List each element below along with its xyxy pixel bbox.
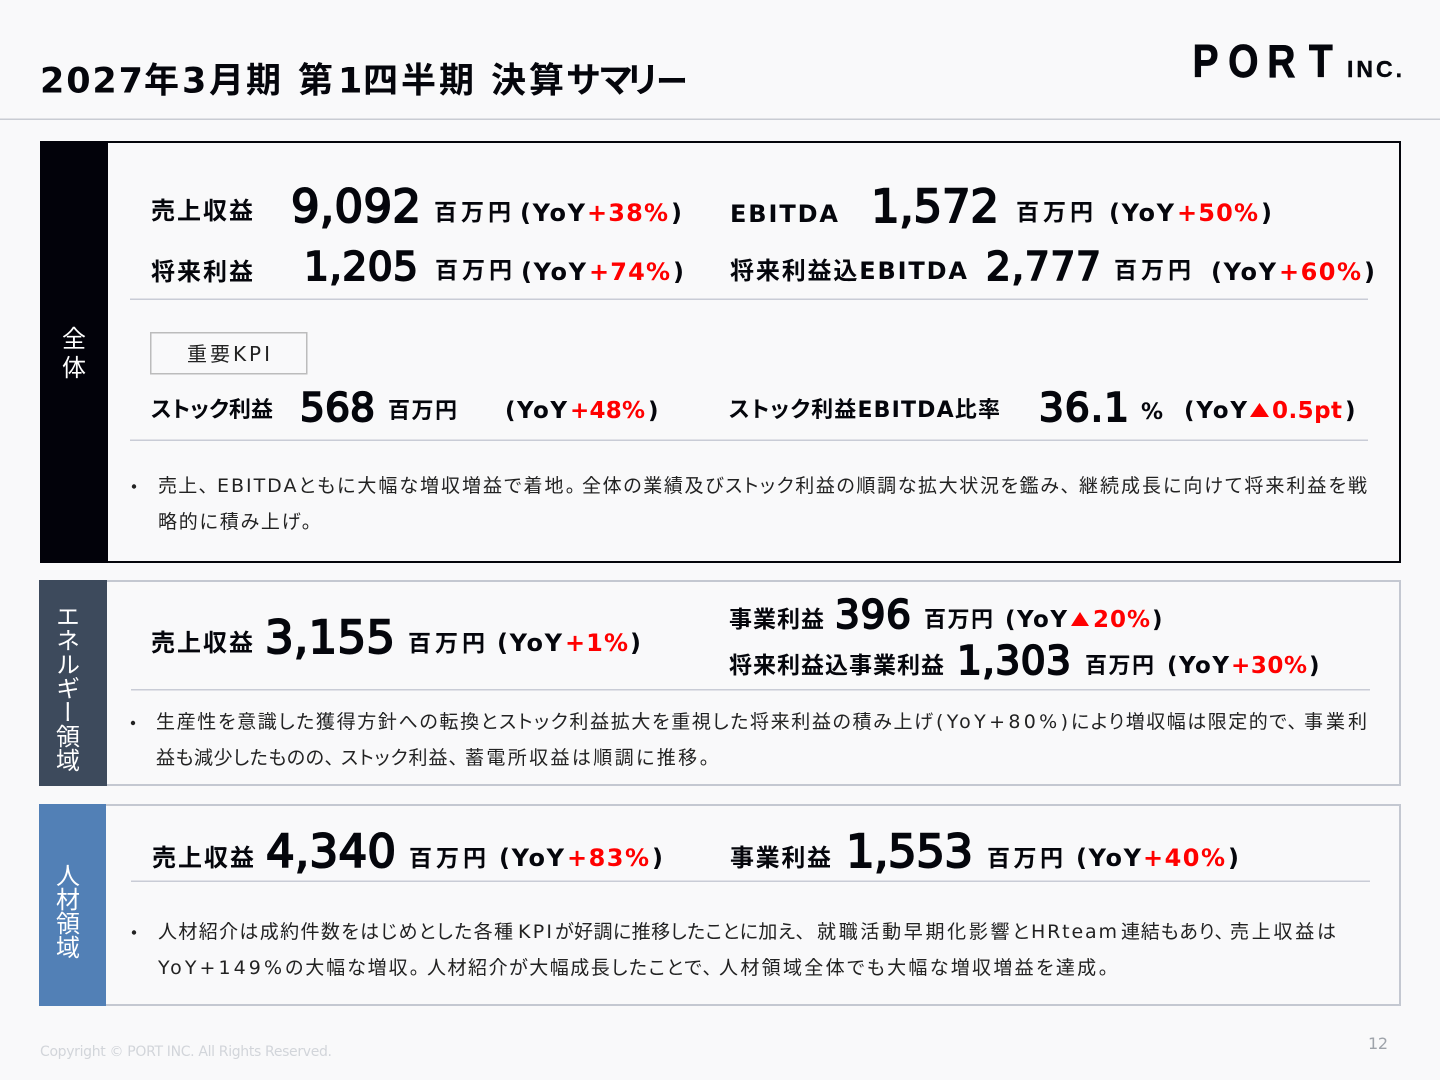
text block: HR commentary [132,921,1336,979]
metric: 将来利益込EBITDA [730,245,1375,290]
metric: ストック利益EBITDA比率: % [1141,400,1163,425]
text block: HR commentary: 売上収益は [1230,921,1336,943]
metric: ストック利益: +48% [570,398,645,424]
title: 決 [491,52,526,104]
text block: energy commentary: 益も減少したものの、 [156,747,334,769]
sidebar label: 全体: 体 [62,348,86,383]
metric: EBITDA: 1,572 [871,180,999,233]
sidebar label: 人材領域: 人材領域 [50,863,86,959]
logo: PORT INC. [1192,36,1402,88]
badge: 重要KPI [151,333,307,374]
metric: 売上収益: (YoY [520,199,586,227]
metric: ストック利益: ) [648,398,659,424]
metric: ストック利益 [151,386,659,431]
text block: overall commentary: EBITDAともに大幅な増収増益で着地。 [217,475,575,497]
title: 半 [401,52,436,104]
text block: overall commentary: 全体の業績及びストック利益の順調な拡大状況を鑑み、 [582,475,1070,497]
panel: 人材領域 (human resources) [39,804,1400,1006]
title: リ [625,52,660,104]
sidebar label: 人材領域 [39,804,106,1006]
metric: 売上収益: 9,092 [291,180,421,233]
metric: 売上収益: 百万円 [409,839,486,873]
metric: 売上収益: ) [630,629,641,657]
metric: 将来利益: +74% [589,258,670,286]
metric: EBITDA: EBITDA [730,200,838,228]
metric: 事業利益: 事業利益 [729,600,824,634]
metric: 売上収益 [151,611,641,664]
title: 1 [338,62,362,102]
sidebar label: 全体: 全 [62,319,86,354]
icon: red triangle [1071,612,1089,626]
metric: ストック利益EBITDA比率: (YoY [1184,398,1247,424]
metric: 将来利益込EBITDA: +60% [1279,258,1361,286]
text block: HR commentary: が好調に推移したことに加え、 [555,921,805,943]
metric: EBITDA: ) [1261,199,1272,227]
metric: 将来利益: ) [673,258,684,286]
metric: 将来利益: 1,205 [304,245,418,290]
panel: エネルギー領域 (energy) [39,580,1400,786]
metric: 将来利益込EBITDA: 2,777 [986,245,1101,290]
metric: ストック利益EBITDA比率: ストック利益EBITDA比率 [729,398,1000,423]
text block: energy commentary: (YoY+80%) [936,711,1068,733]
logo: PORT INC.: PORT [1192,36,1333,88]
metric: 事業利益: (YoY [1076,844,1142,872]
metric: 売上収益: +83% [567,844,649,872]
title: 四 [363,52,398,104]
text block: energy commentary: により増収幅は限定的で、 [1071,711,1297,733]
metric: 将来利益: 将来利益 [151,252,253,287]
text block: HR commentary: 人材紹介は成約件数をはじめとした各種 [158,921,513,943]
metric: EBITDA: 百万円 [1016,193,1093,227]
metric: 事業利益: 事業利益 [730,838,831,873]
text block: energy commentary: 事業利 [1304,711,1367,733]
text block: overall commentary: 略的に積み上げ。 [158,511,311,533]
title: 期 [246,52,281,104]
logo: PORT INC.: INC. [1347,56,1402,82]
icon: red triangle [1250,403,1269,417]
title: ー [656,56,688,102]
text block: HR commentary: KPI [518,921,552,943]
metric: 事業利益: (YoY [1005,607,1067,633]
text block: overall commentary [132,475,1367,533]
metric: EBITDA: +50% [1177,199,1258,227]
metric: 売上収益: ) [652,844,663,872]
sidebar label: エネルギー領域 [39,580,107,786]
text block: HR commentary: HRteam [1031,921,1117,943]
title: 年 [144,52,179,104]
metric: 売上収益: 売上収益 [151,623,253,658]
metric: 将来利益込事業利益: ) [1309,653,1320,679]
metric: 将来利益込EBITDA: ) [1364,258,1375,286]
sidebar label: エネルギー領域: エネルギー領域 [50,604,86,772]
metric: ストック利益EBITDA比率 [729,386,1356,431]
metric: 将来利益込事業利益: 将来利益込事業利益 [729,646,944,680]
text block: HR commentary: 就職活動早期化影響と [817,921,1029,943]
metric: 事業利益: 20% [1093,607,1150,633]
metric: 売上収益: 売上収益 [151,191,253,226]
metric: 将来利益込EBITDA: (YoY [1211,258,1277,286]
metric: 売上収益: 百万円 [408,624,485,658]
metric: 売上収益: (YoY [497,629,563,657]
metric: 事業利益: +40% [1143,844,1225,872]
metric: ストック利益EBITDA比率: ) [1345,398,1356,424]
title: サ [566,52,601,104]
text block: energy commentary: 蓄電所収益は順調に推移。 [465,747,709,769]
metric: 事業利益 [729,593,1163,638]
metric: ストック利益: 百万円 [388,393,457,425]
metric: 将来利益込事業利益: 1,303 [957,639,1071,684]
metric: EBITDA: (YoY [1109,199,1175,227]
text block: overall commentary: 継続成長に向けて将来利益を戦 [1079,475,1367,497]
footer: copyright: Copyright © PORT INC. All Rights Reserved. [40,1044,332,1060]
text block: energy commentary: ストック利益、 [341,747,458,769]
metric: 売上収益: 3,155 [265,611,395,664]
text block: HR commentary: 人材紹介が大幅成長したことで、 [427,957,712,979]
metric: 売上収益 [152,825,663,878]
metric: 将来利益込EBITDA: 百万円 [1114,251,1191,285]
metric: 事業利益: 1,553 [846,825,973,878]
metric: 事業利益 [730,825,1239,878]
text block: HR commentary: の大幅な増収。 [285,957,419,979]
metric: ストック利益: ストック利益 [151,392,273,424]
title: マ [598,52,633,104]
metric: 売上収益: 4,340 [266,825,396,878]
metric: 事業利益: ) [1228,844,1239,872]
title: 期 [439,52,474,104]
text block: HR commentary: YoY+149% [157,957,282,979]
title: 月 [209,52,244,104]
metric: 事業利益: ) [1152,607,1163,633]
metric: EBITDA [730,180,1272,233]
metric: ストック利益: (YoY [505,398,567,424]
metric: 将来利益込EBITDA: 将来利益込EBITDA [730,257,967,285]
metric: 売上収益: 百万円 [434,193,511,227]
metric: 将来利益 [151,245,684,290]
metric: 将来利益込事業利益 [729,639,1320,684]
text block: HR commentary: 人材領域全体でも大幅な増収増益を達成。 [719,957,1108,979]
metric: 売上収益: 売上収益 [152,838,254,873]
metric: 事業利益: 百万円 [924,602,993,634]
metric: 事業利益: 396 [835,593,911,638]
metric: 将来利益: (YoY [521,258,587,286]
panel: 全体 (overall) [40,141,1400,563]
metric: 売上収益: (YoY [499,844,565,872]
title: 第 [298,52,333,104]
title: 2027 [40,62,143,102]
text block: energy commentary [131,711,1367,769]
footer: page number: 12 [1368,1034,1388,1053]
metric: ストック利益EBITDA比率: 36.1 [1039,386,1129,431]
metric: ストック利益: 568 [300,386,375,431]
metric: 売上収益: ) [671,199,682,227]
text block: overall commentary: 売上、 [158,475,208,497]
text block: energy commentary: 生産性を意識した獲得方針への転換とストック利益拡大を重視した将来利益の積み上げ [156,711,933,733]
metric: 売上収益: +1% [565,629,628,657]
metric: 将来利益: 百万円 [435,251,512,285]
text block: HR commentary: 連結もあり、 [1121,921,1224,943]
metric: ストック利益EBITDA比率: 0.5pt [1272,398,1342,424]
metric: 将来利益込事業利益: 百万円 [1085,648,1154,680]
badge: 重要KPI: 重要KPI [187,342,270,366]
sidebar label: 全体 [40,141,108,563]
title: 3 [182,62,206,102]
title: 算 [529,52,564,104]
metric: 売上収益: +38% [587,199,668,227]
metric: 売上収益 [151,180,682,233]
metric: 将来利益込事業利益: +30% [1231,653,1307,679]
metric: 将来利益込事業利益: (YoY [1167,653,1229,679]
metric: 事業利益: 百万円 [987,839,1063,873]
